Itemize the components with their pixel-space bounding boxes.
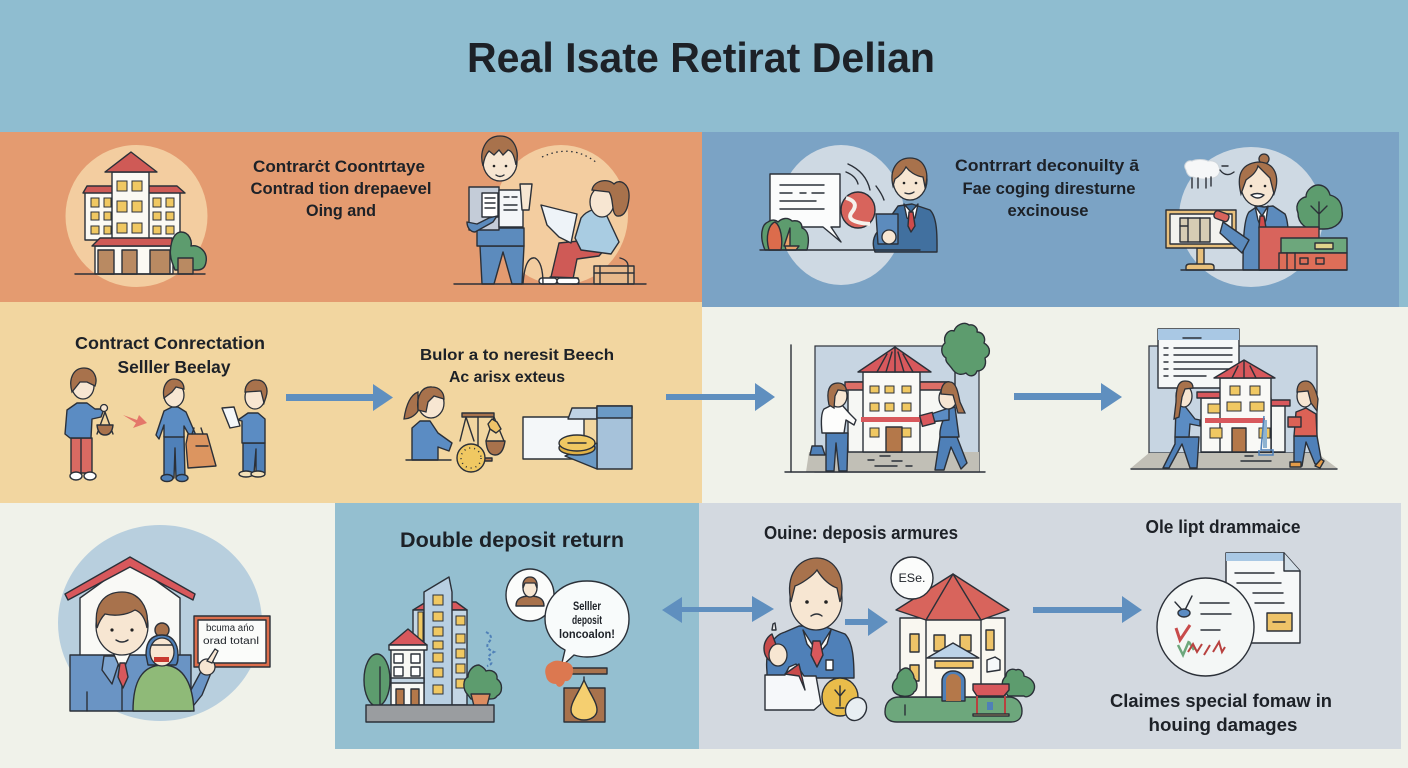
icon: document with checklist (1157, 553, 1300, 676)
illustration: man with booklet and seated woman (454, 136, 646, 285)
text block: contract lines: Contrad tion drepaevel (250, 180, 432, 198)
text block: claims: houing damages (1148, 714, 1298, 735)
sign: bcuma ańo (206, 623, 254, 634)
text block: buyer breach (420, 347, 614, 386)
red arrow (123, 415, 147, 428)
arrow: small (845, 608, 888, 636)
arrow (286, 384, 393, 411)
panel: double deposit return (335, 503, 699, 749)
arrow (1033, 596, 1142, 623)
bubble: price (891, 557, 933, 599)
icon: document (1158, 329, 1239, 388)
text block: contract correction: Contract Conrectation (75, 333, 265, 353)
illustration: document and house visit (1131, 329, 1337, 469)
speech bubble (545, 581, 629, 667)
illustration: agent and woman with sign (58, 525, 270, 721)
illustration: three people handover (65, 368, 267, 482)
illustration: woman presenting with books (1166, 147, 1347, 287)
text block: claims (1110, 690, 1332, 735)
text block: disclosure lines: excinouse (1008, 202, 1088, 220)
illustration: woman with scale and coin (404, 387, 632, 472)
illustration: buildings (364, 577, 502, 722)
text block: contract lines: Contrarċt Coontrtaye (253, 158, 425, 176)
text block: buyer breach: Bulor a to neresit Beech (420, 347, 614, 364)
illustration: agent with speech bubble (760, 145, 937, 285)
illustration: house handover scene (785, 323, 989, 472)
title: Real Isate Retirat Delian (467, 34, 935, 81)
speech bubble: deposit (572, 613, 602, 627)
text block: contract lines: Oing and (306, 202, 376, 220)
icon: tree (942, 323, 989, 376)
sign: orad totanl (203, 636, 259, 647)
speech bubble: loncoalon! (559, 627, 615, 641)
heading: Double deposit return (400, 529, 624, 552)
text block: disclosure lines: Fae coging diresturne (962, 180, 1136, 198)
text block: disclosure lines: Contrrart deconuilty ā (955, 157, 1140, 175)
panel: yellow seller breach (0, 302, 702, 503)
text block: contract correction: Selller Beelay (118, 357, 231, 377)
heading: deposit: Ouine: deposis armures (764, 523, 958, 543)
speech bubble: Selller (573, 599, 601, 613)
illustration: house on lawn (885, 574, 1035, 722)
icon: seller avatar (506, 569, 554, 621)
panel: blue contract (702, 132, 1399, 307)
text block: disclosure lines (955, 157, 1140, 220)
text block: claims: Claimes special fomaw in (1110, 690, 1332, 711)
heading: damage: Ole lipt drammaice (1146, 517, 1300, 537)
panel: orange contract (0, 132, 702, 302)
illustration: worried agent with coin (764, 558, 871, 724)
header band with title (0, 0, 1408, 307)
bubble: price: ESe. (898, 571, 926, 585)
arrow: double headed (662, 596, 774, 623)
panel: deposit amounts and damages (699, 503, 1401, 749)
arrow: to house handover (666, 383, 775, 411)
text block: contract lines (250, 158, 432, 220)
sign (194, 616, 270, 667)
icon: gavel and weight (545, 661, 607, 722)
text block: buyer breach: Ac arisx exteus (449, 369, 565, 386)
icon: apartment building (66, 145, 208, 287)
arrow: to inspection (1014, 383, 1122, 411)
text block: contract correction (75, 333, 265, 377)
